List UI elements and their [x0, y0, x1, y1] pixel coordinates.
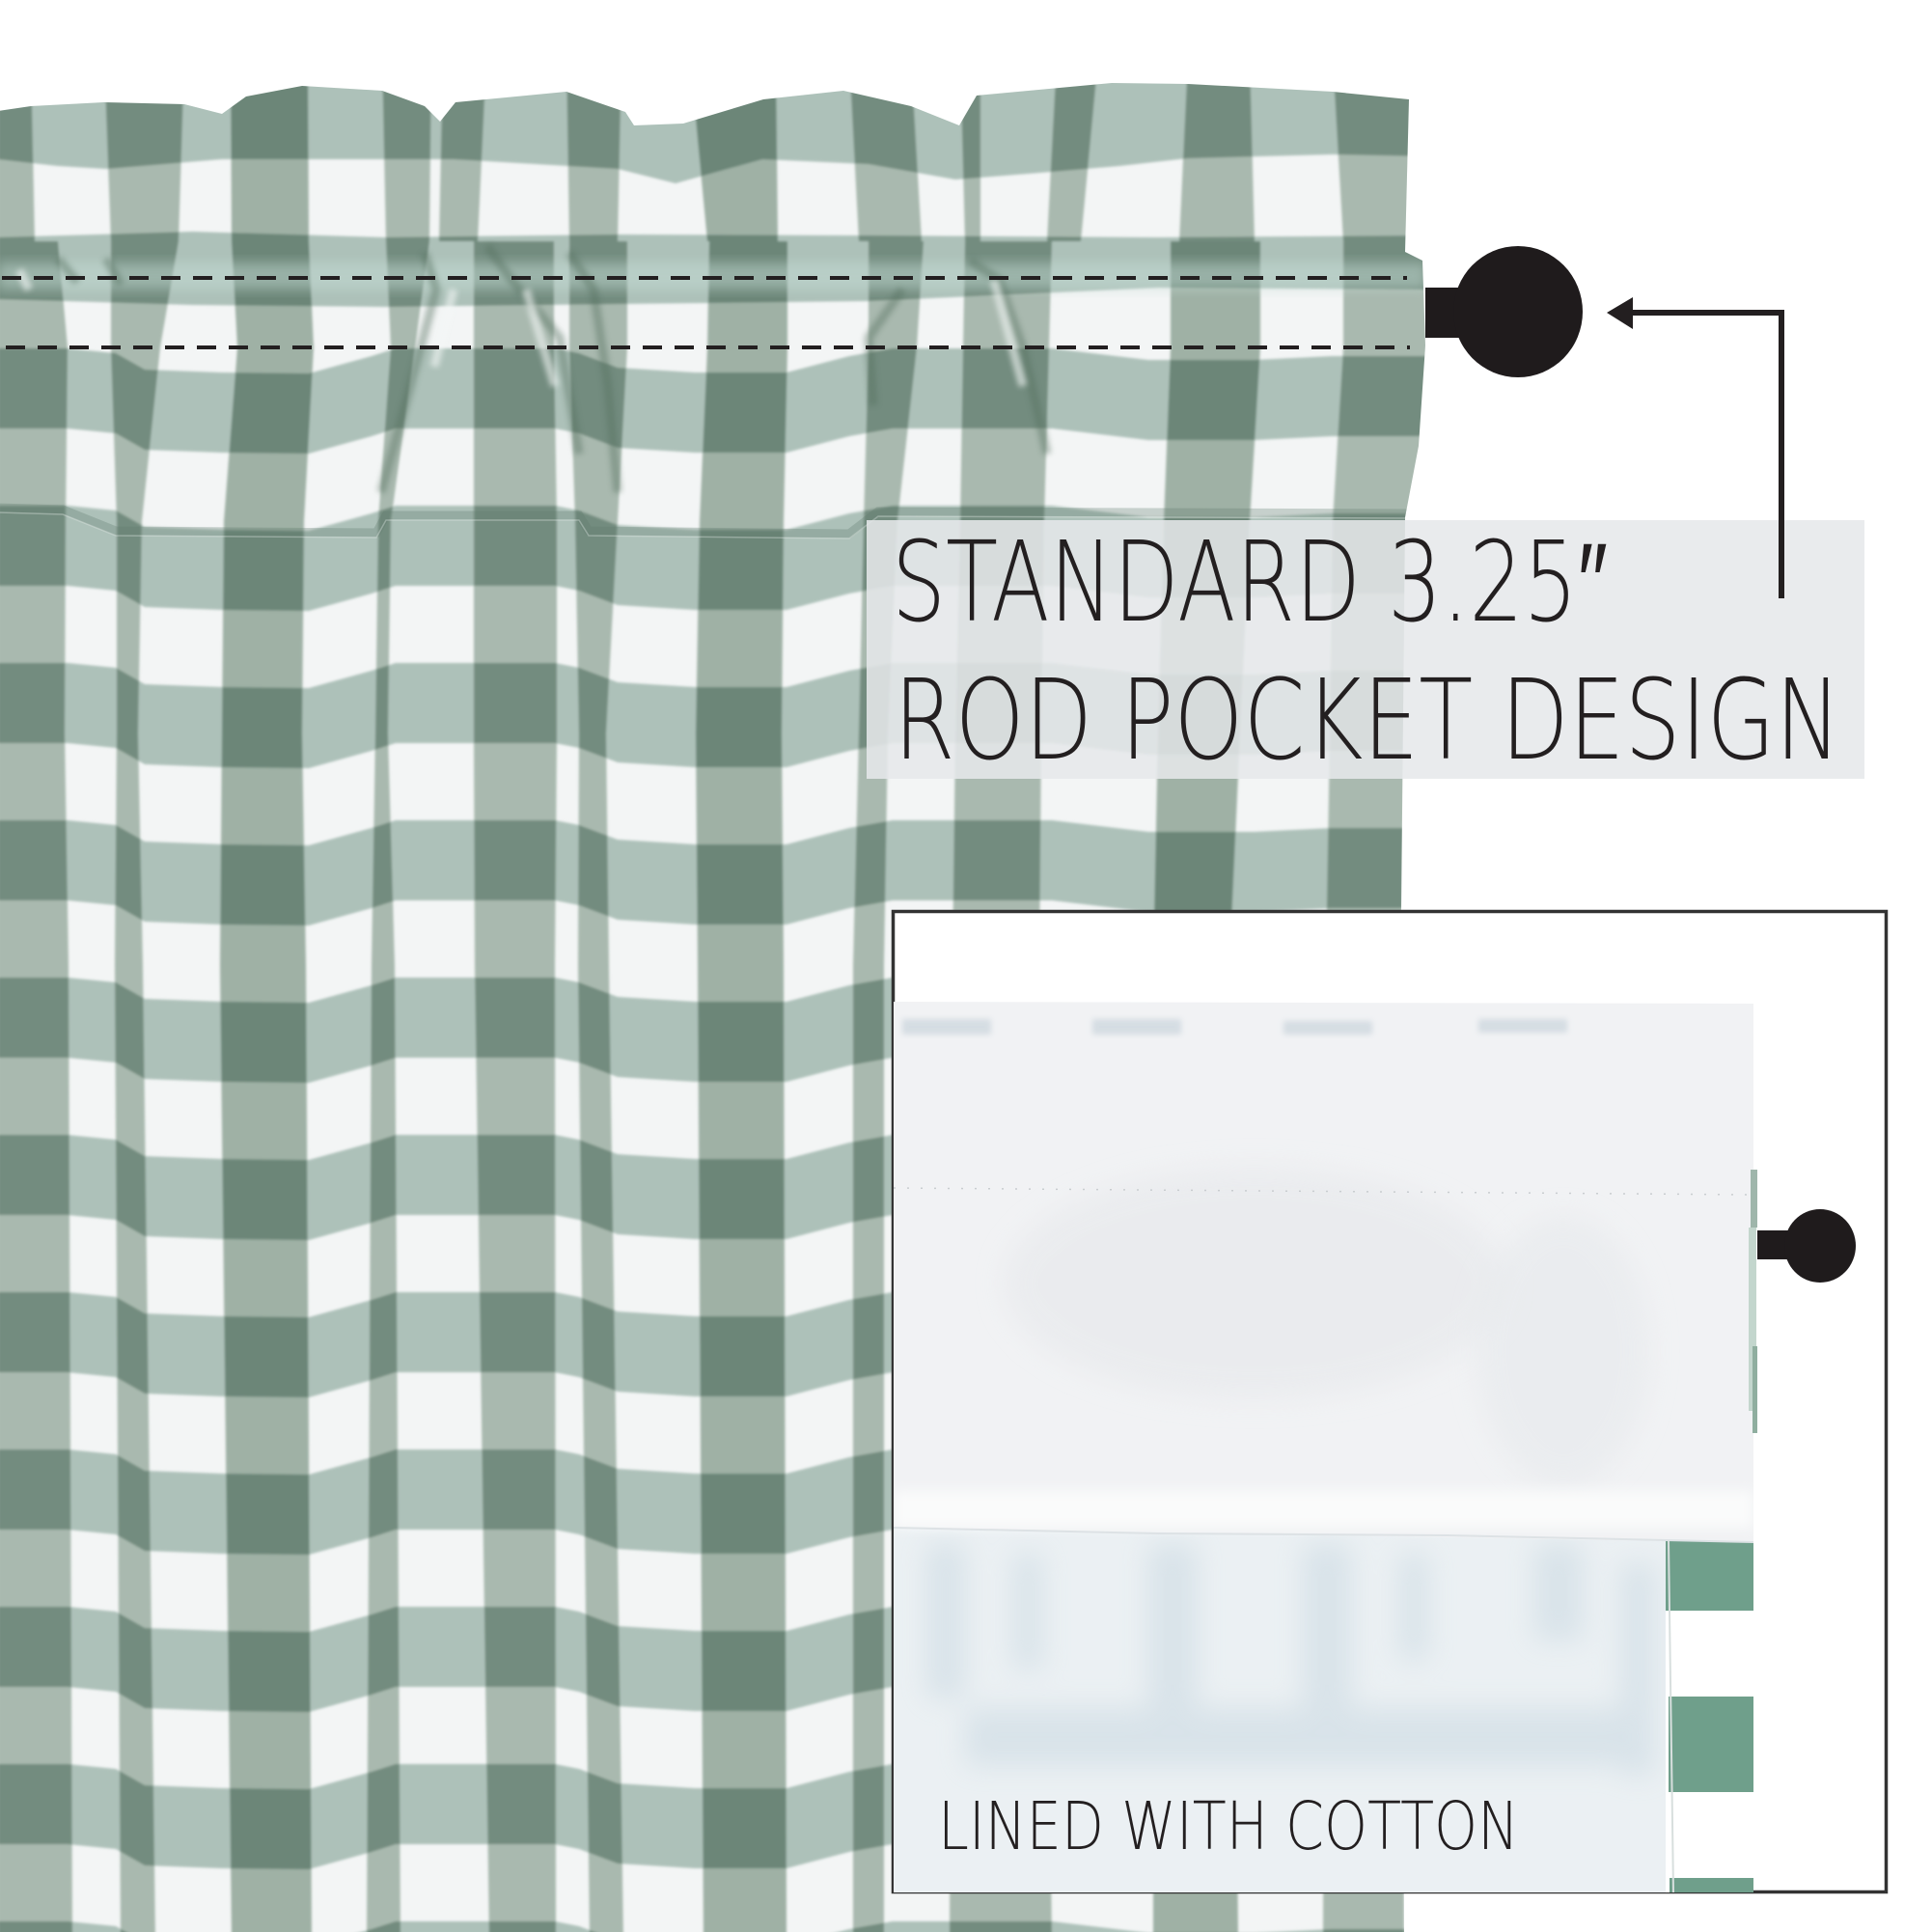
main gingham curtain photo [0, 58, 1436, 1932]
dashed rod pocket guide lines [2, 278, 1410, 347]
icon: small curtain rod [1757, 1209, 1856, 1283]
icon: curtain rod [1425, 246, 1583, 377]
lower lining area [894, 1525, 1666, 1892]
rod pocket gather ruffle [0, 246, 1426, 492]
darker vertical gingham bands [220, 58, 1260, 1932]
panel: lining inset [894, 911, 1886, 1892]
lining photo [894, 1002, 1753, 1892]
vertical gingham bands [0, 58, 1428, 1932]
horizontal gingham bands [0, 68, 1428, 1932]
label: lined with cotton: LINED WITH COTTON [938, 1788, 1519, 1865]
hem edge stripes [1666, 1534, 1753, 1892]
upper lining pocket [894, 1002, 1753, 1542]
arrow pointing at rod [1607, 297, 1781, 598]
heading: rod pocket text [892, 518, 1841, 786]
heading: rod pocket text: STANDARD 3.25″ [892, 518, 1608, 648]
back fabric sliver [1749, 1170, 1757, 1433]
callout: rod pocket [867, 518, 1864, 786]
hem seam [0, 508, 1419, 538]
